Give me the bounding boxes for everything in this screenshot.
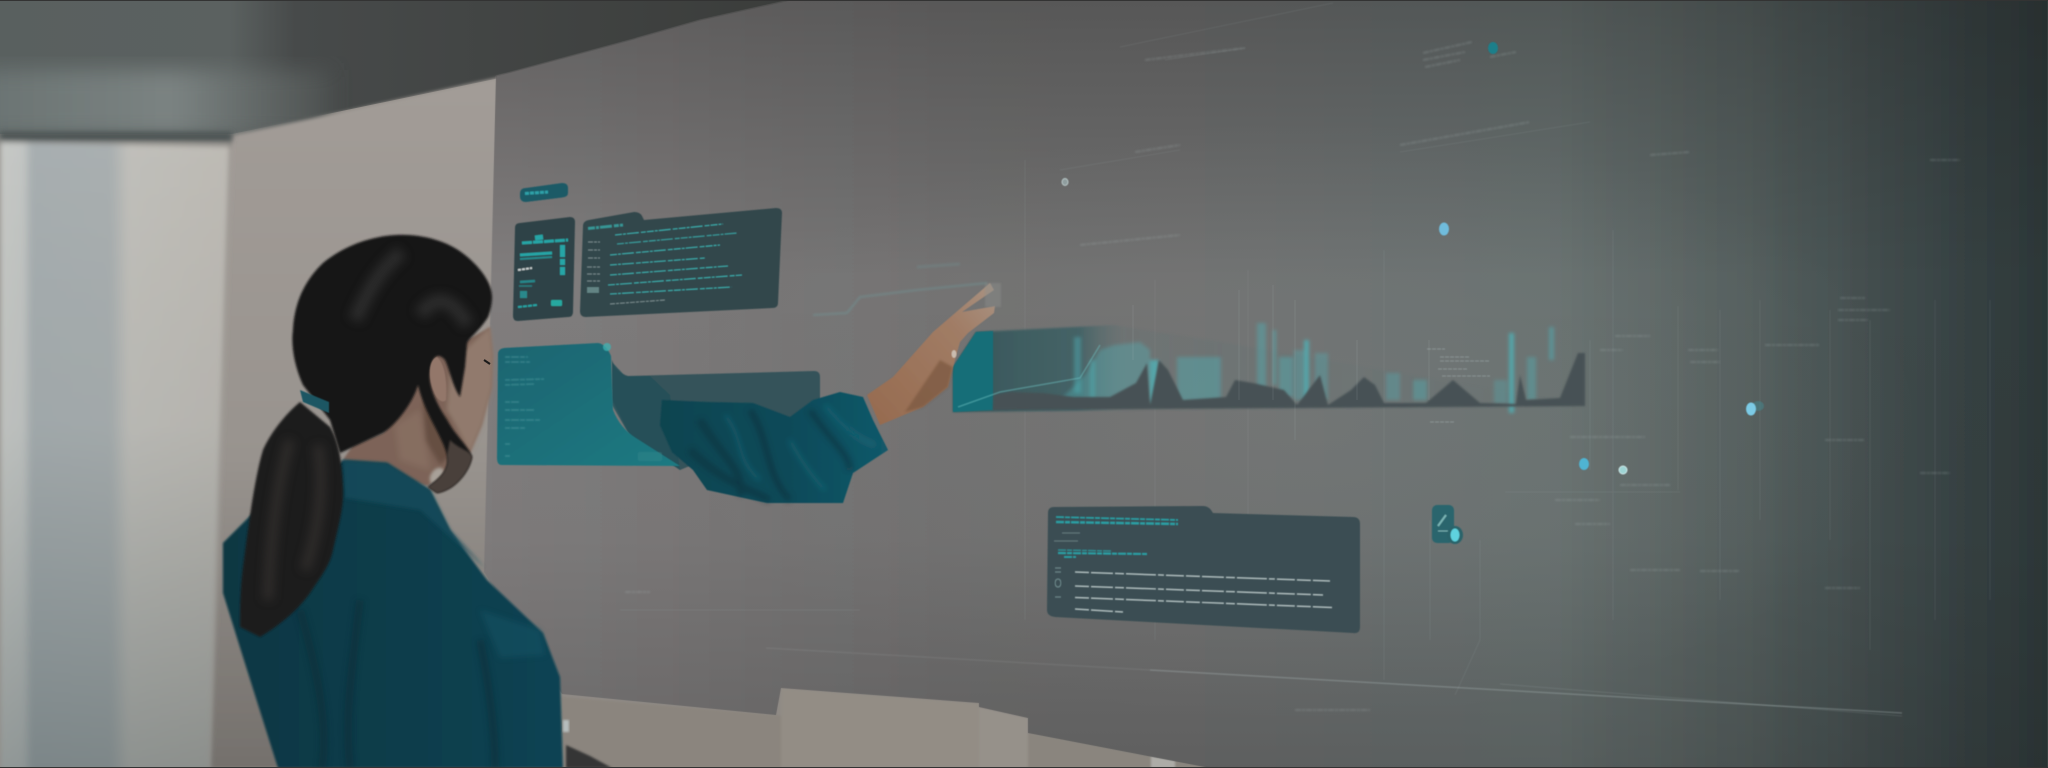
translucent fingertip panel bbox=[985, 283, 1001, 307]
dark bracket bbox=[1206, 748, 1230, 768]
panel: teal card bbox=[497, 343, 680, 466]
jacket bbox=[223, 460, 563, 768]
chart dark silhouette bbox=[993, 353, 1585, 410]
chart panel bbox=[953, 285, 1585, 440]
panel: lower dark text card bbox=[1047, 506, 1360, 633]
sleeve folds bbox=[690, 410, 850, 500]
faint upper trend line bbox=[813, 264, 987, 315]
chart trend line bbox=[958, 345, 1100, 407]
bright strip on counter bbox=[1151, 740, 1175, 768]
faint glow in the right-hand centre bbox=[680, 120, 1920, 720]
chart gray labels bbox=[1427, 349, 1490, 422]
lower counter surface bbox=[540, 688, 1230, 768]
neck highlight bbox=[395, 410, 430, 470]
faint grid lines bbox=[620, 3, 1990, 695]
wall beside the person bbox=[210, 76, 505, 768]
hand bbox=[867, 283, 995, 425]
pill label bbox=[520, 183, 568, 202]
window blind bbox=[0, 132, 232, 768]
lower card gray side text bbox=[1054, 533, 1080, 541]
folder card teal text lines bbox=[588, 224, 742, 294]
jacket collar bbox=[343, 460, 485, 568]
panel: small dark card bbox=[513, 217, 575, 321]
thumbnail glint bbox=[952, 350, 956, 358]
sleeve bbox=[660, 392, 888, 503]
person bbox=[223, 235, 1001, 768]
ponytail bbox=[240, 402, 343, 637]
panel: dark panel behind the teal card bbox=[612, 360, 820, 470]
collar glint bbox=[427, 465, 447, 487]
diagonal panel shade bbox=[612, 362, 680, 470]
teal card highlight bbox=[603, 343, 611, 351]
hair sheen bbox=[355, 252, 468, 325]
card button bbox=[551, 300, 562, 306]
folder card gray text lines bbox=[587, 242, 665, 304]
chart teal bars bbox=[1060, 323, 1554, 413]
ponytail sheen bbox=[268, 440, 321, 600]
jaw shadow bbox=[423, 400, 457, 465]
jaw strand bbox=[428, 440, 472, 493]
icon tile with cyan dot bbox=[1432, 505, 1463, 544]
jacket pocket flap bbox=[480, 610, 545, 658]
eye lash bbox=[484, 360, 490, 364]
chart panel teal edge bbox=[953, 331, 993, 412]
ceiling bbox=[0, 0, 820, 134]
panel: dark folder card with text bbox=[580, 208, 782, 317]
lower card body text bbox=[1075, 572, 1332, 612]
glint at hip bbox=[563, 720, 569, 732]
hair bbox=[240, 235, 492, 637]
teal card button bbox=[638, 452, 662, 461]
card label bbox=[518, 268, 532, 270]
chart vertical ticks bbox=[1133, 285, 1429, 440]
hair tie bbox=[300, 390, 329, 413]
lower card icons bbox=[1055, 568, 1061, 597]
diagonal light edge line bbox=[766, 648, 1902, 716]
jacket folds bbox=[300, 600, 495, 768]
card icon bbox=[520, 291, 527, 298]
data nodes bbox=[1062, 42, 1764, 474]
neck and face bbox=[343, 327, 493, 487]
object near hip bbox=[566, 745, 612, 768]
projected display wall bbox=[484, 0, 2048, 768]
faint data labels bbox=[625, 42, 1960, 710]
card bars bbox=[518, 237, 568, 307]
ceiling band bbox=[0, 70, 330, 136]
folder card tag bbox=[587, 287, 599, 293]
ear bbox=[430, 357, 446, 401]
teal card text bbox=[505, 357, 544, 456]
palm shadow bbox=[905, 360, 953, 412]
lower card teal heading bbox=[1056, 517, 1178, 557]
